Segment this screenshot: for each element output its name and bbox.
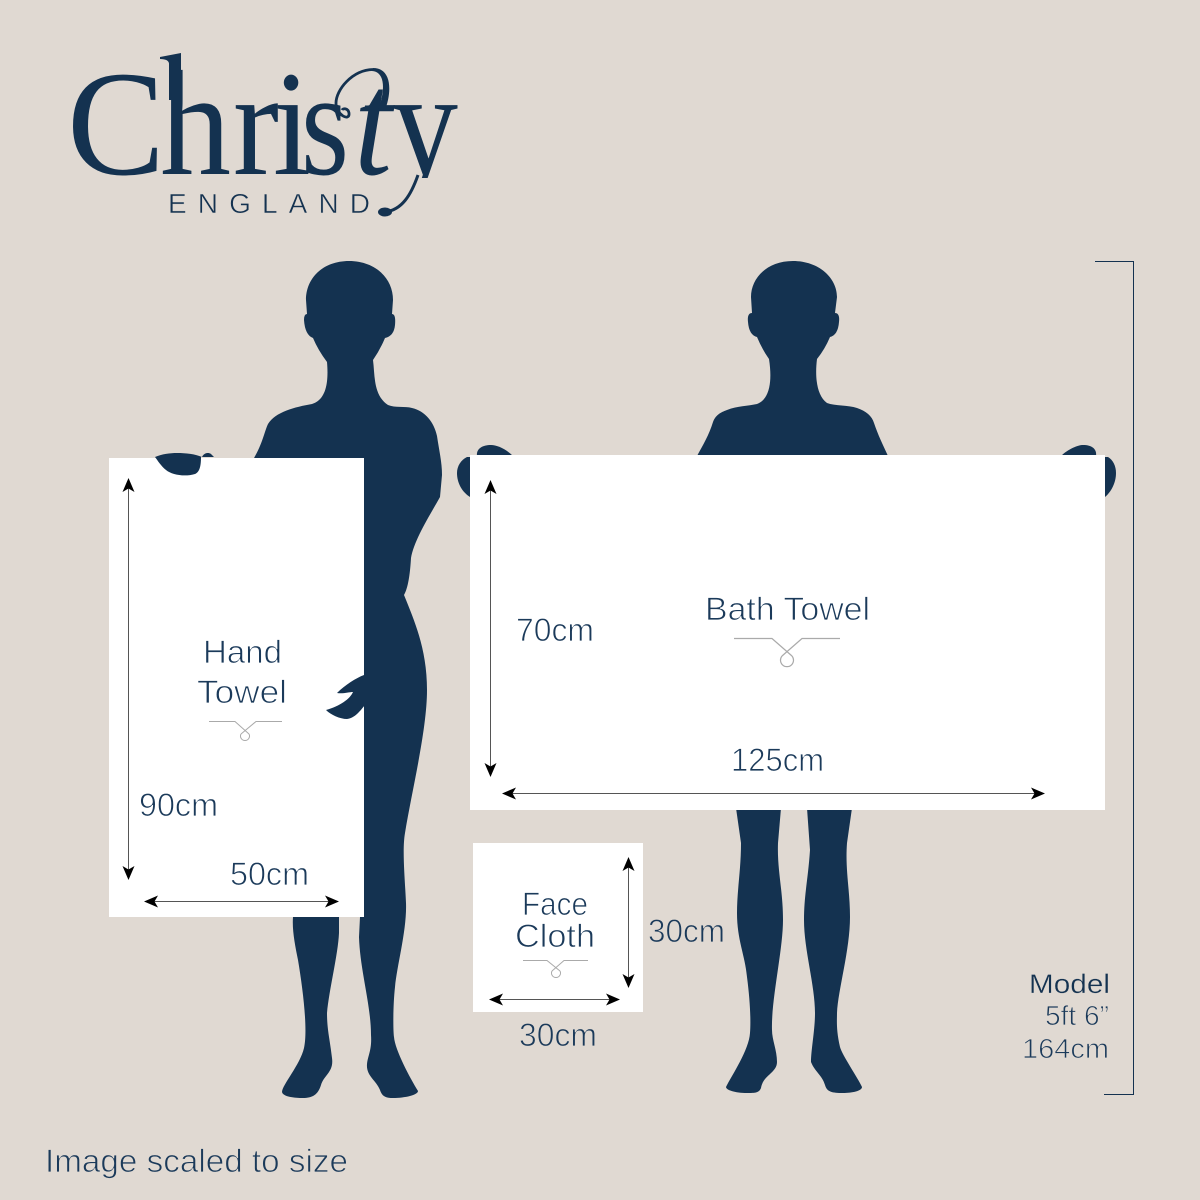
logo: Christy England: t — [354, 41, 395, 207]
label: Face Cloth: Cloth — [515, 918, 595, 954]
panel: hand towel — [109, 453, 365, 917]
arrow: bath towel height — [490, 481, 492, 776]
logo: Christy England: h — [160, 41, 231, 207]
figure: right model — [457, 261, 1116, 1093]
model height label — [1022, 969, 1110, 1064]
icon: hand towel knot — [209, 722, 282, 741]
dimension: face cloth 30cm height: 30cm — [648, 913, 725, 949]
dimension: 90cm: 90cm — [139, 787, 218, 823]
label: Hand Towel: Hand — [203, 634, 282, 670]
label: Bath Towel: Bath Towel — [705, 591, 870, 627]
model height label: 5ft 6” — [1045, 1000, 1109, 1031]
icon: hand gripping towel top — [155, 453, 214, 475]
label: Face Cloth: Face — [522, 886, 588, 922]
arrow: hand towel height — [128, 479, 130, 879]
panel: face cloth — [473, 843, 643, 1012]
dimension: face cloth 30cm width: 30cm — [519, 1017, 597, 1053]
logo: Christy England: i — [273, 41, 311, 207]
arrow: bath towel width — [503, 792, 1044, 794]
arrow: face cloth width — [490, 998, 619, 1000]
label: Face Cloth — [515, 886, 595, 954]
model height label: Model — [1029, 969, 1110, 999]
model height label: 164cm — [1022, 1033, 1109, 1064]
footnote: Image scaled to size — [45, 1143, 348, 1179]
logo: Christy England: C — [67, 41, 165, 207]
dimension: 50cm: 50cm — [230, 856, 309, 892]
figure: left model — [254, 261, 442, 1098]
dimension: 70cm: 70cm — [516, 612, 594, 648]
height bracket — [1095, 262, 1134, 1094]
logo: Christy England: y — [392, 41, 458, 207]
logo: Christy England: s — [301, 41, 349, 207]
label: Hand Towel: Towel — [197, 674, 287, 710]
icon: face cloth knot — [523, 960, 588, 978]
arrow: face cloth height — [628, 858, 630, 987]
icon: bath towel knot — [734, 638, 840, 667]
panel: bath towel — [470, 455, 1105, 810]
logo: Christy England — [67, 41, 458, 219]
dimension: 125cm: 125cm — [731, 742, 824, 778]
icon: hand at towel side — [326, 675, 365, 719]
logo: Christy England: ENGLAND — [168, 188, 370, 219]
logo: Christy England: r — [233, 41, 279, 207]
arrow: hand towel width — [145, 900, 338, 902]
label: Hand Towel — [197, 634, 287, 710]
